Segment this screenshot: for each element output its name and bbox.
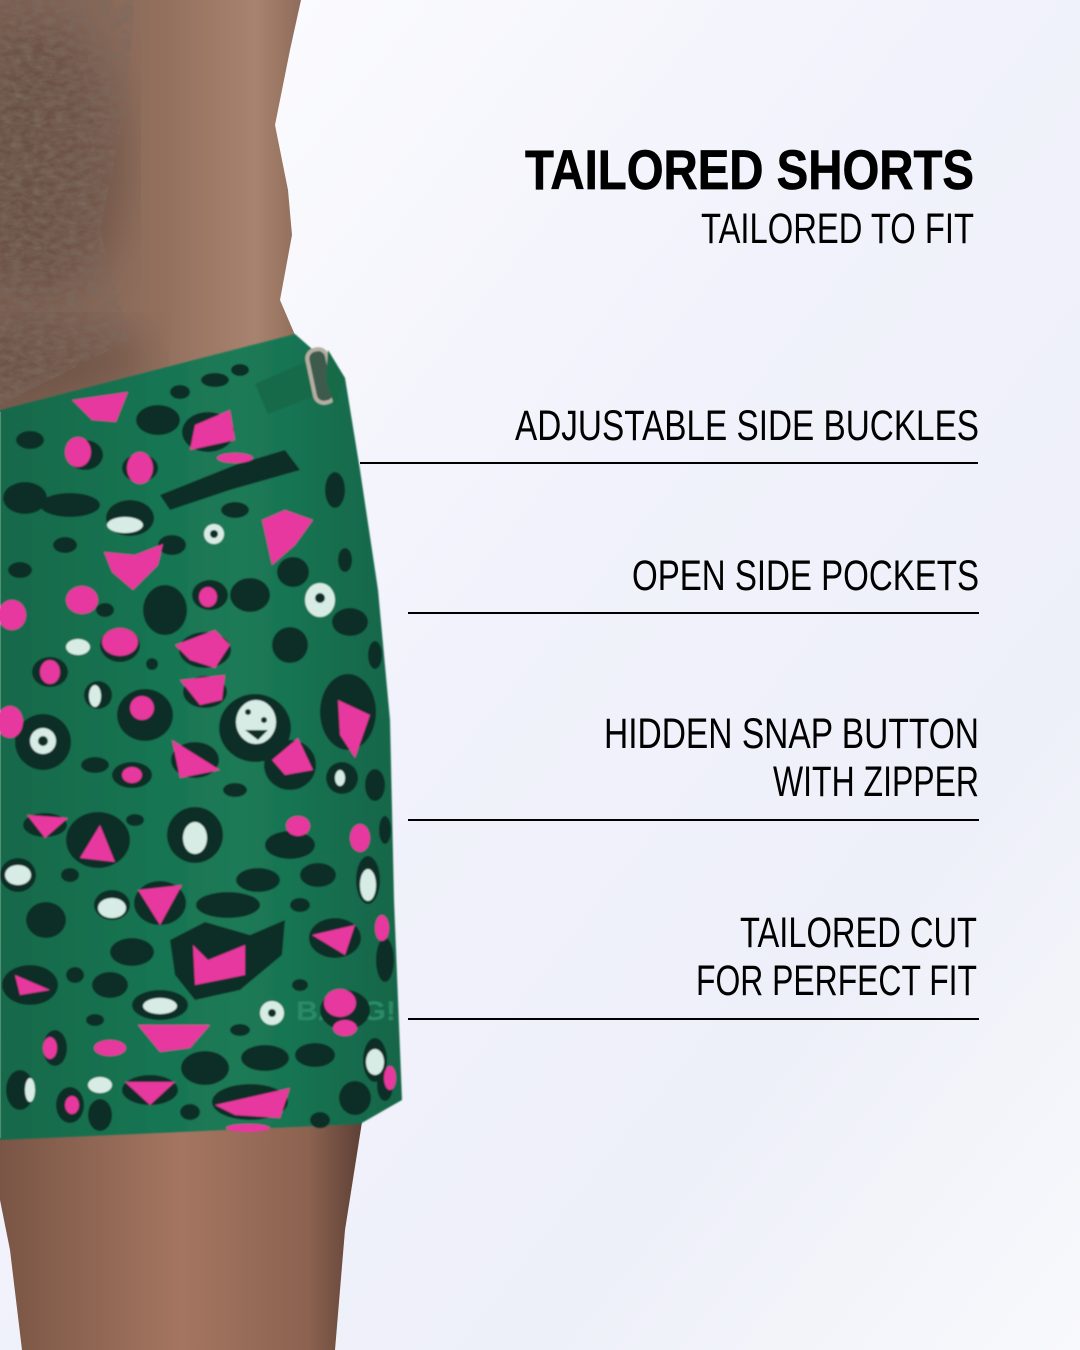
- buckle strap: [255, 348, 345, 414]
- feature: tailored cut for perfect fit: [408, 909, 979, 1020]
- dark spot centres: [38, 530, 325, 1017]
- title block: [525, 138, 974, 253]
- feature: hidden snap button with zipper: WITH ZIPPER: [773, 758, 979, 806]
- feature: tailored cut for perfect fit: TAILORED CUT: [740, 909, 977, 957]
- dark leopard spots: [0, 364, 394, 1131]
- shorts base: [0, 334, 402, 1140]
- photo: green patterned shorts: [0, 334, 402, 1140]
- pink spots: [0, 392, 396, 1132]
- brand mark on fabric: BANG!: [296, 996, 396, 1026]
- subtitle: TAILORED TO FIT: [701, 205, 974, 253]
- feature: hidden snap button with zipper: [408, 710, 979, 821]
- white spots: [5, 517, 384, 1102]
- feature: hidden snap button with zipper: HIDDEN SNAP BUTTON: [604, 710, 979, 758]
- photo: torso: [0, 0, 301, 412]
- feature: open side pockets: OPEN SIDE POCKETS: [632, 552, 979, 600]
- title: TAILORED SHORTS: [525, 138, 974, 201]
- photo: thigh: [0, 1122, 362, 1350]
- feature: tailored cut for perfect fit: FOR PERFECT FIT: [696, 957, 977, 1005]
